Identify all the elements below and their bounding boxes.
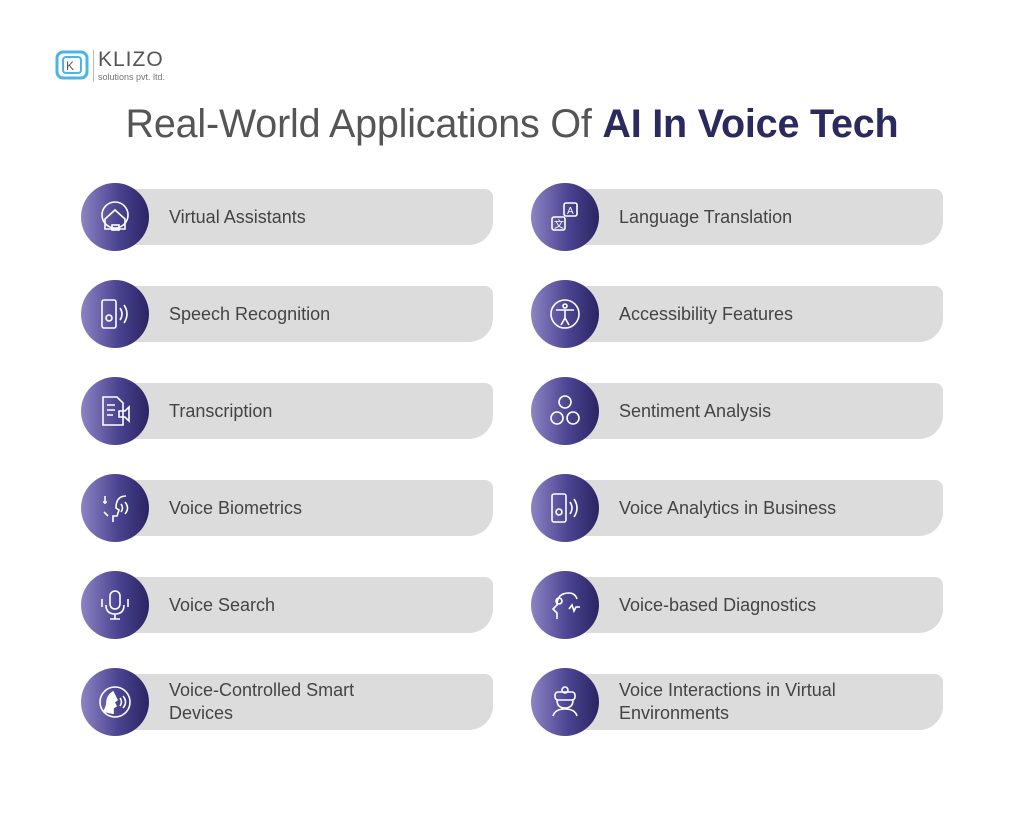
item: Speech Recognition bbox=[81, 280, 493, 348]
title: Real-World Applications Of AI In Voice Tech bbox=[126, 102, 898, 146]
item: Language Translation: Language Translation bbox=[619, 206, 792, 226]
item: Sentiment Analysis bbox=[531, 377, 943, 445]
item: Voice-Controlled Smart Devices: Voice-Controlled Smart Devices bbox=[169, 680, 354, 723]
logo: K bbox=[66, 59, 74, 73]
item: Virtual Assistants: Virtual Assistants bbox=[169, 206, 306, 226]
item: Voice-based Diagnostics: Voice-based Diagnostics bbox=[619, 594, 816, 614]
item: Virtual Assistants bbox=[81, 183, 493, 251]
item: Sentiment Analysis: Sentiment Analysis bbox=[619, 400, 771, 420]
item: Voice Interactions in Virtual Environments: Voice Interactions in Virtual Environments bbox=[619, 680, 836, 723]
item: Voice Search: Voice Search bbox=[169, 594, 275, 614]
item: Voice Interactions in Virtual Environments bbox=[531, 668, 943, 736]
item: Transcription bbox=[81, 377, 493, 445]
item: Transcription: Transcription bbox=[169, 400, 272, 420]
item: Voice Biometrics bbox=[81, 474, 493, 542]
item: Voice Biometrics: Voice Biometrics bbox=[169, 498, 302, 518]
item: Voice-based Diagnostics bbox=[531, 571, 943, 639]
logo: solutions pvt. ltd. bbox=[98, 72, 165, 82]
item: Language Translation bbox=[531, 183, 943, 251]
item: Voice Analytics in Business bbox=[531, 474, 943, 542]
item: Speech Recognition: Speech Recognition bbox=[169, 304, 330, 324]
item: Voice Analytics in Business: Voice Analytics in Business bbox=[619, 498, 836, 518]
item: Voice-Controlled Smart Devices bbox=[81, 668, 493, 736]
logo bbox=[56, 48, 165, 82]
item: Accessibility Features: Accessibility Features bbox=[619, 304, 793, 324]
item: Voice Search bbox=[81, 571, 493, 639]
item: Language Translation: 文 bbox=[554, 218, 564, 231]
logo: KLIZO bbox=[98, 48, 164, 71]
item: Language Translation: A bbox=[567, 206, 574, 217]
item: Accessibility Features bbox=[531, 280, 943, 348]
